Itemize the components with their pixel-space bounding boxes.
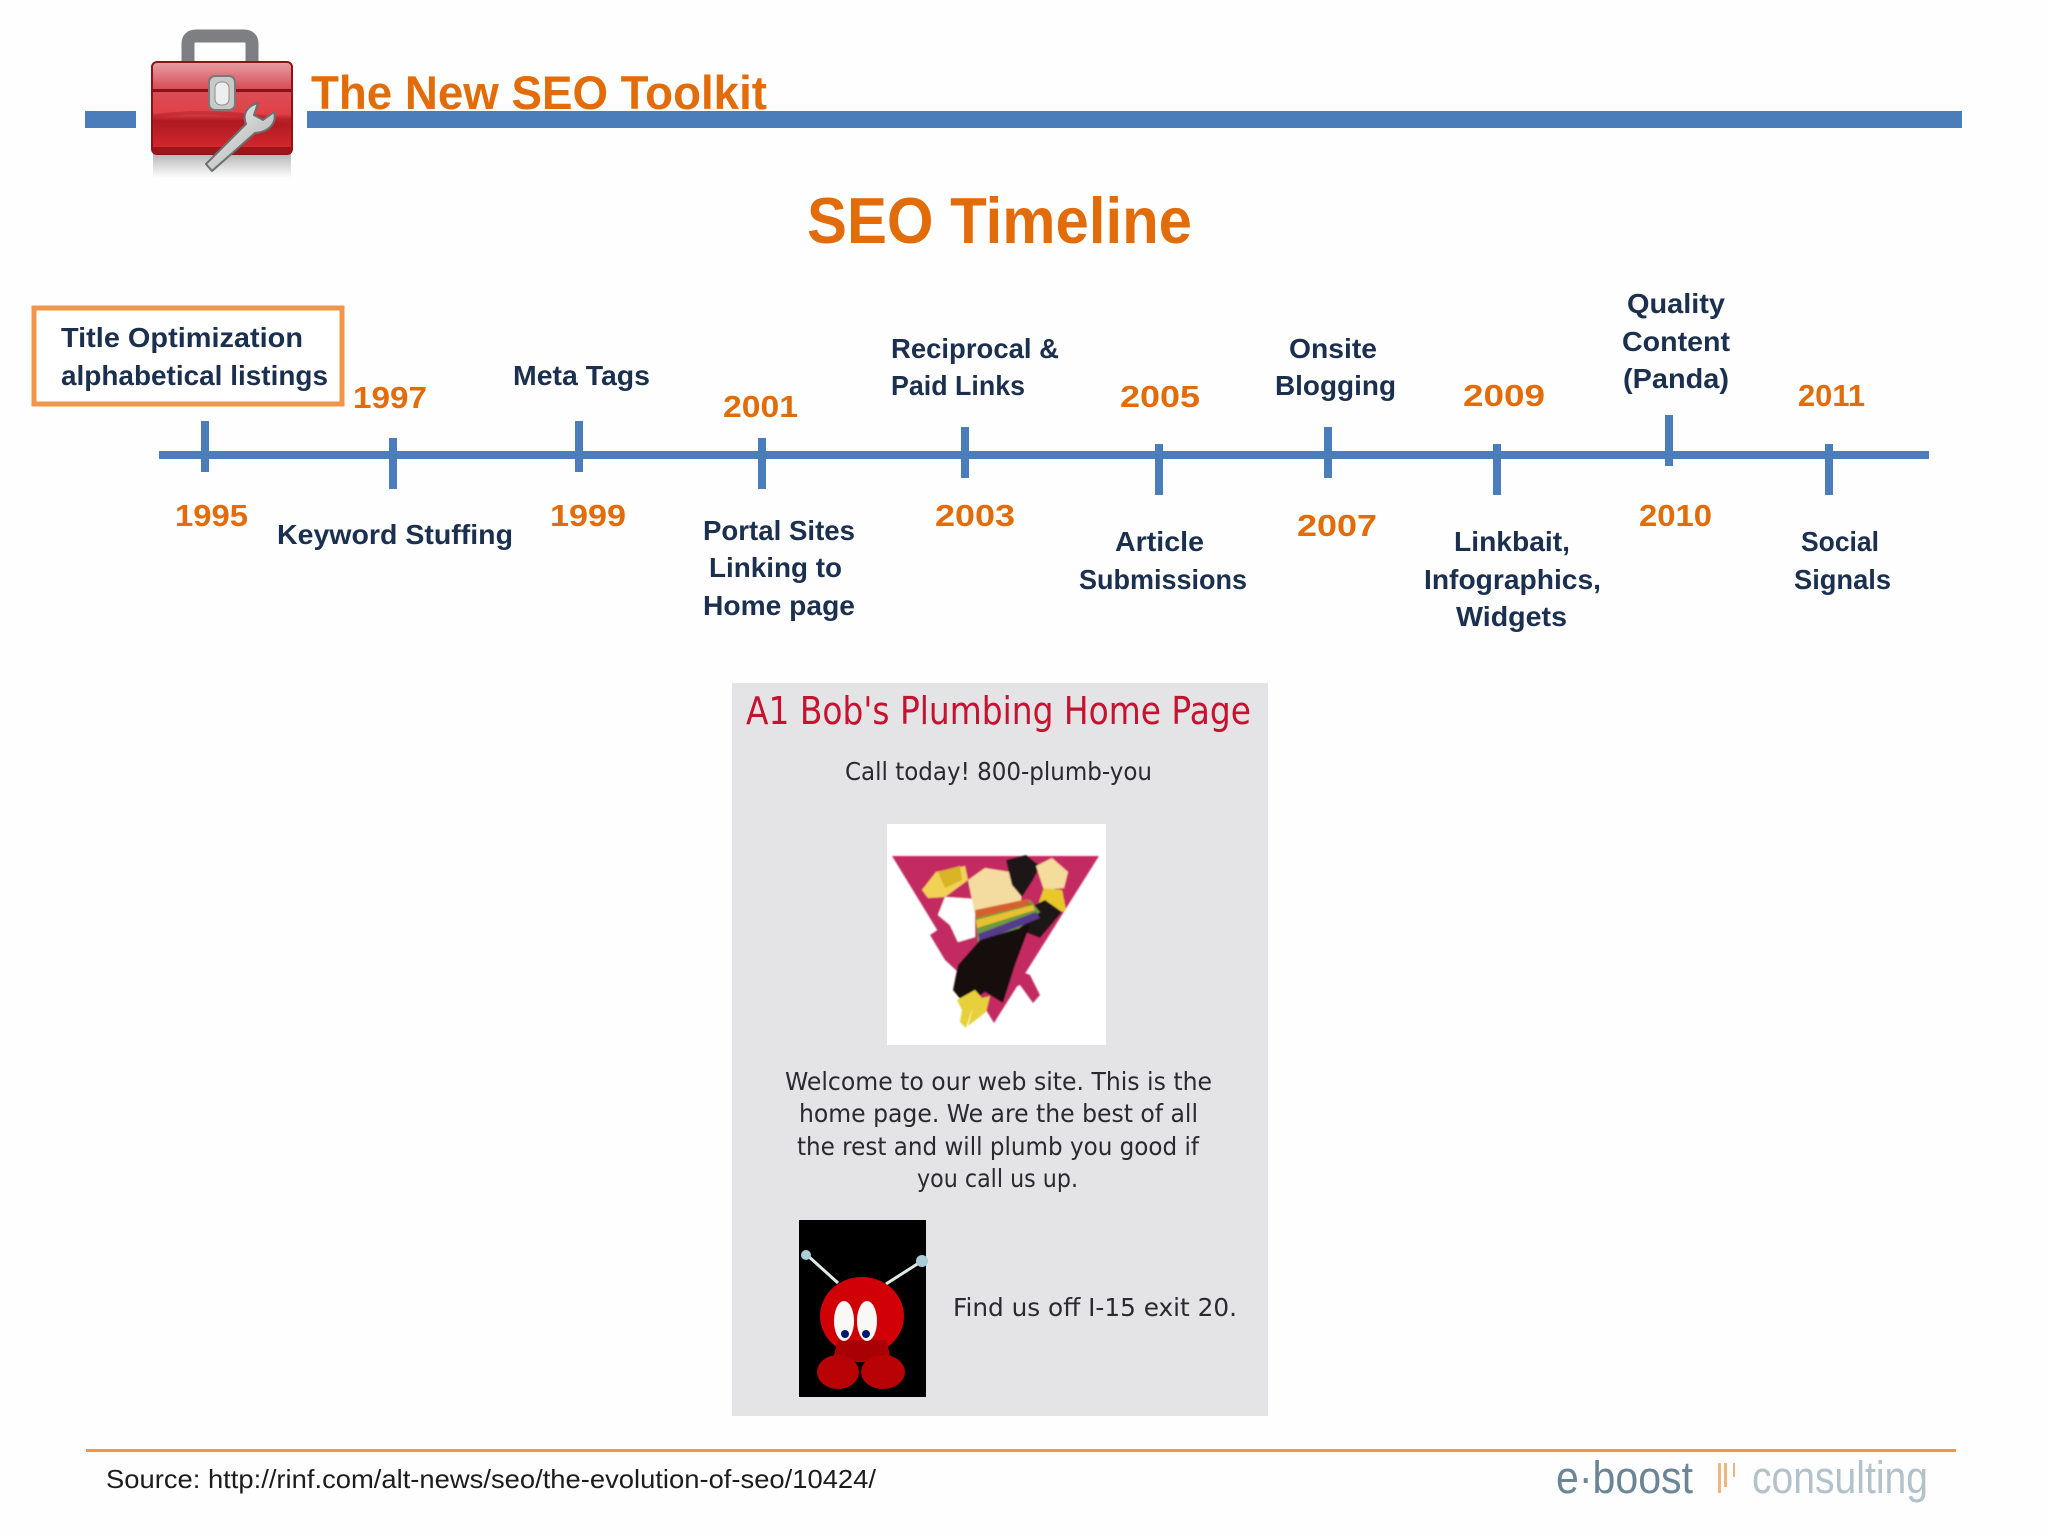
milestone labels bbox=[277, 288, 1891, 632]
logo: e-boost consulting: consulting bbox=[1752, 1452, 1928, 1503]
logo: e-boost consulting bbox=[1556, 1452, 1928, 1503]
directions text: Find us off I-15 exit 20. bbox=[953, 1293, 1237, 1322]
milestone labels: Quality bbox=[1627, 288, 1725, 319]
milestone labels: (Panda) bbox=[1623, 363, 1729, 394]
year labels: 2003 bbox=[935, 498, 1015, 533]
year labels: 2009 bbox=[1463, 378, 1545, 413]
logo: e-boost consulting: e·boost bbox=[1556, 1452, 1693, 1503]
milestone labels: Onsite bbox=[1289, 333, 1377, 364]
callout: 1995 title optimization box: alphabetical listings bbox=[61, 360, 328, 391]
title: SEO Timeline: SEO Timeline bbox=[807, 184, 1192, 257]
phone line: Call today! 800-plumb-you bbox=[845, 757, 1152, 786]
heading: The New SEO Toolkit: The New SEO Toolkit bbox=[311, 66, 767, 119]
year labels: 1997 bbox=[353, 380, 427, 415]
milestone labels: Social bbox=[1801, 526, 1879, 557]
milestone labels: Paid Links bbox=[891, 370, 1025, 401]
welcome paragraph: the rest and will plumb you good if bbox=[797, 1132, 1200, 1161]
callout: 1995 title optimization box bbox=[34, 308, 342, 404]
milestone labels: Widgets bbox=[1456, 601, 1567, 632]
milestone labels: Submissions bbox=[1079, 564, 1247, 595]
welcome paragraph: you call us up. bbox=[917, 1164, 1078, 1193]
milestone labels: Home page bbox=[703, 590, 855, 621]
milestone labels: Content bbox=[1622, 326, 1730, 357]
year labels: 2007 bbox=[1297, 508, 1377, 543]
red creature illustration bbox=[799, 1220, 928, 1397]
milestone labels: Meta Tags bbox=[513, 360, 650, 391]
milestone labels: Linking to bbox=[709, 552, 842, 583]
welcome paragraph: Welcome to our web site. This is the bbox=[785, 1067, 1212, 1096]
milestone labels: Reciprocal & bbox=[891, 333, 1059, 364]
year labels: 1995 bbox=[175, 498, 248, 533]
year labels: 1999 bbox=[550, 498, 626, 533]
year labels: 2011 bbox=[1798, 378, 1865, 413]
year labels: 2005 bbox=[1120, 379, 1200, 414]
milestone labels: Keyword Stuffing bbox=[277, 519, 513, 550]
callout: 1995 title optimization box: Title Optimization bbox=[61, 322, 303, 353]
timeline axis with ticks bbox=[159, 415, 1929, 495]
milestone labels: Blogging bbox=[1275, 370, 1396, 401]
welcome paragraph: home page. We are the best of all bbox=[799, 1099, 1198, 1128]
superhero plumber illustration bbox=[887, 824, 1106, 1045]
panel heading: A1 Bob's Plumbing Home Page bbox=[746, 689, 1251, 733]
welcome paragraph bbox=[785, 1067, 1212, 1193]
header bar bbox=[85, 111, 1962, 128]
year labels: 2001 bbox=[723, 389, 798, 424]
panel: A1 Bob's Plumbing home page screenshot bbox=[732, 683, 1268, 1416]
milestone labels: Article bbox=[1115, 526, 1204, 557]
year labels: 2010 bbox=[1639, 498, 1712, 533]
milestone labels: Portal Sites bbox=[703, 515, 855, 546]
milestone labels: Infographics, bbox=[1424, 564, 1601, 595]
source citation: Source: http://rinf.com/alt-news/seo/the-evolution-of-seo/10424/ bbox=[106, 1464, 877, 1494]
year labels bbox=[175, 378, 1865, 543]
icon: red toolbox with wrench bbox=[152, 36, 292, 178]
footer rule bbox=[86, 1449, 1956, 1452]
milestone labels: Signals bbox=[1794, 564, 1891, 595]
milestone labels: Linkbait, bbox=[1454, 526, 1570, 557]
